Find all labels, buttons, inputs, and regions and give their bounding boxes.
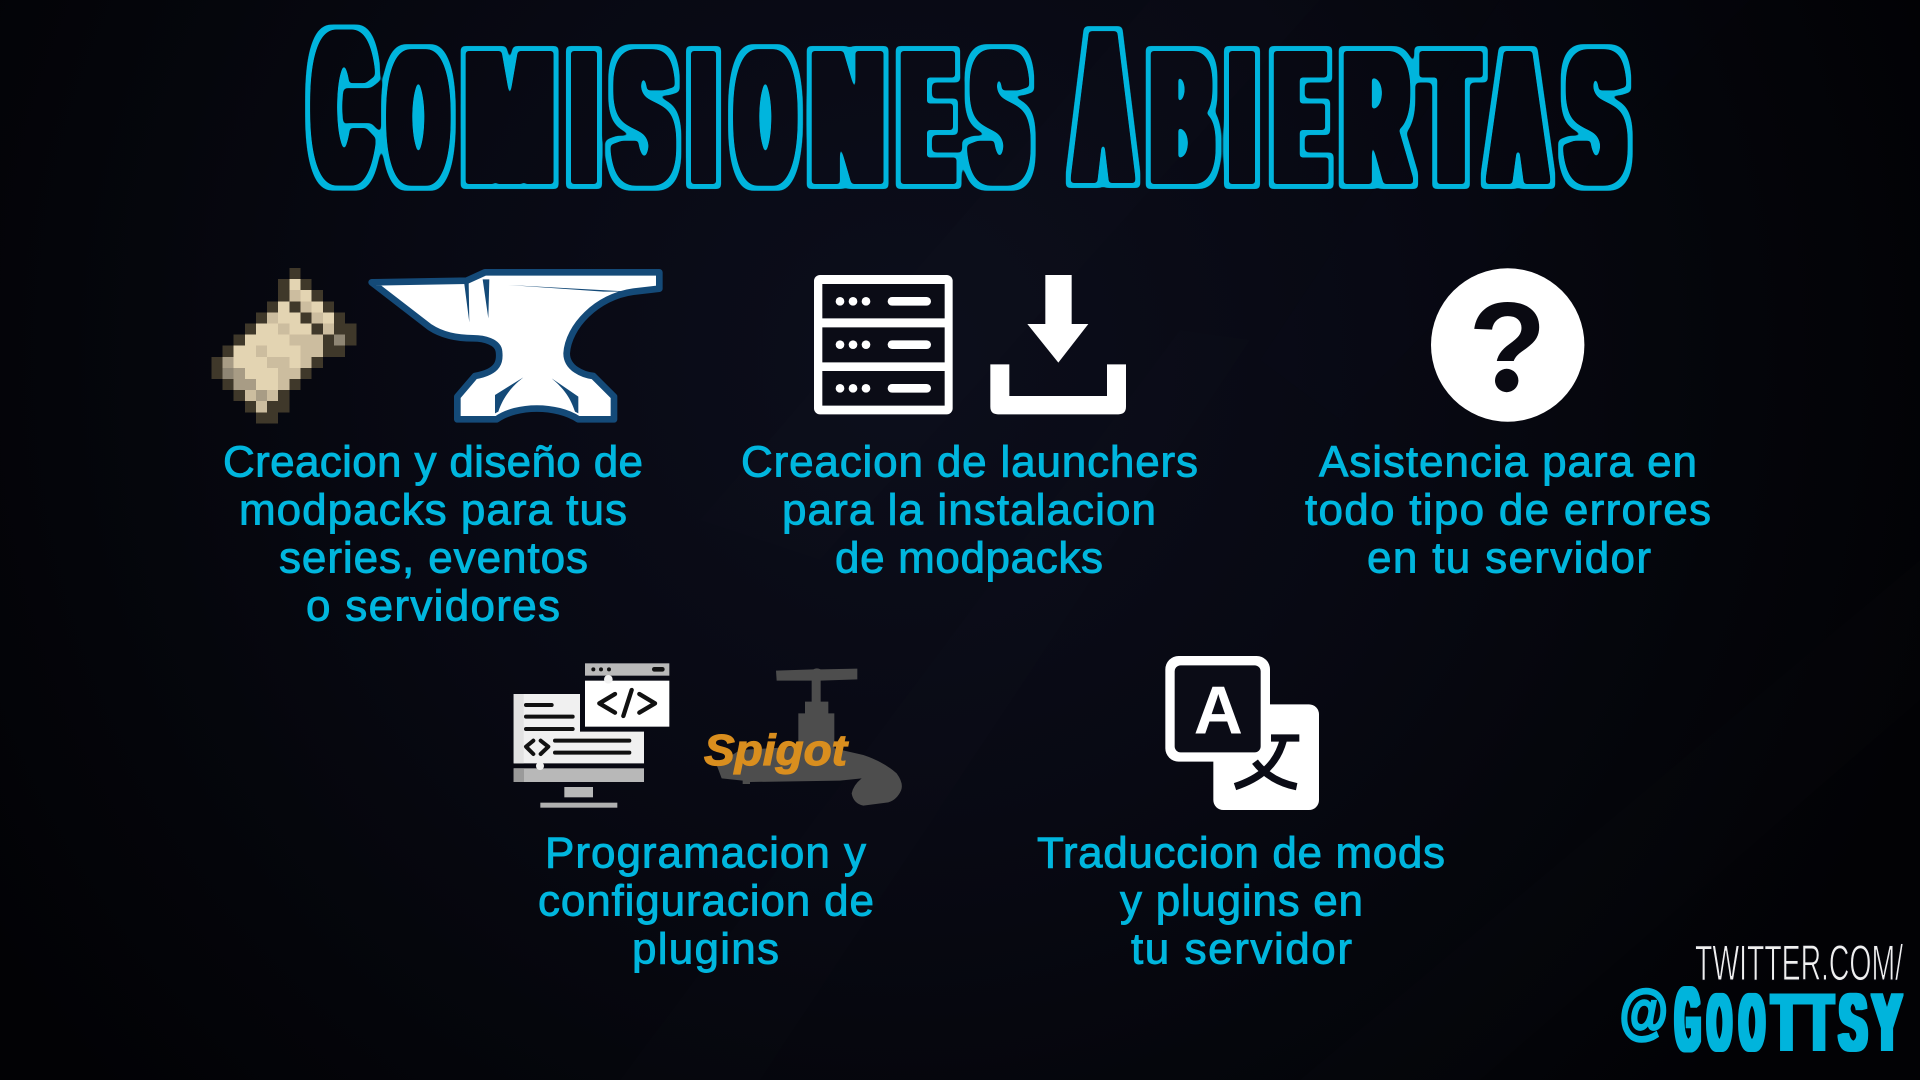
icon: spigot logo <box>704 668 902 806</box>
title: N <box>813 15 882 221</box>
handle: T <box>1805 976 1833 1067</box>
title: O <box>391 14 446 221</box>
text: plugins: Programacion y <box>545 828 866 878</box>
handle: O <box>1740 977 1764 1068</box>
title: O <box>738 14 793 221</box>
text: assistance: todo tipo de errores <box>1305 486 1711 534</box>
credit: twitter handle <box>1620 935 1903 1071</box>
panel: modpacks <box>211 268 659 630</box>
panel: launchers <box>741 275 1198 582</box>
icon: download <box>990 275 1126 414</box>
text: modpacks <box>223 438 643 630</box>
text: launchers <box>741 438 1198 582</box>
icon: translate: A <box>1194 672 1243 748</box>
icon: tap <box>717 668 902 806</box>
icon: server <box>814 275 953 414</box>
panel: translation <box>1037 656 1445 974</box>
text: modpacks: Creacion y diseño de <box>223 438 643 486</box>
title: I <box>1232 14 1252 221</box>
icon: question mark: ? <box>1468 277 1547 420</box>
text: translation: y plugins en <box>1120 876 1363 926</box>
spigot wordmark: Spigot <box>704 726 849 775</box>
icon: translate <box>1165 656 1319 810</box>
text: assistance: Asistencia para en <box>1319 438 1697 486</box>
text: plugins: plugins <box>632 924 779 974</box>
text: launchers: para la instalacion <box>782 486 1156 534</box>
icon: paper scroll <box>211 268 356 423</box>
title: A <box>1492 14 1544 221</box>
text: modpacks: series, eventos <box>279 534 588 582</box>
text: translation <box>1037 828 1445 974</box>
icon: anvil <box>372 272 659 419</box>
title: E <box>1277 14 1323 221</box>
handle: G <box>1676 969 1700 1071</box>
text: plugins: configuracion de <box>538 876 874 926</box>
at sign: @ <box>1620 978 1668 1045</box>
title: E <box>904 13 951 221</box>
title: S <box>973 15 1026 221</box>
text: modpacks: o servidores <box>306 582 560 630</box>
icon: code windows <box>514 663 669 808</box>
text: launchers: de modpacks <box>835 534 1103 582</box>
title: M <box>467 14 552 221</box>
handle: O <box>1708 977 1731 1067</box>
text: assistance: en tu servidor <box>1367 534 1651 582</box>
text: plugins <box>538 828 874 974</box>
handle <box>1676 969 1901 1071</box>
text: launchers: Creacion de launchers <box>741 438 1198 486</box>
title: S <box>616 15 671 221</box>
title: T <box>1426 15 1476 221</box>
title: B <box>1153 15 1211 221</box>
text: translation: Traduccion de mods <box>1037 828 1445 878</box>
handle: T <box>1772 978 1801 1068</box>
title <box>315 0 1623 226</box>
text: translation: tu servidor <box>1131 924 1352 974</box>
handle: S <box>1839 977 1867 1068</box>
title: I <box>695 15 712 221</box>
title: I <box>574 14 594 221</box>
panel: plugins <box>514 663 902 974</box>
icon: question mark <box>1431 268 1584 422</box>
title: S <box>1569 15 1623 221</box>
text: modpacks: modpacks para tus <box>239 486 627 534</box>
panel: assistance <box>1305 268 1711 582</box>
handle: Y <box>1873 976 1901 1067</box>
title: R <box>1346 15 1407 221</box>
text: assistance <box>1305 438 1711 582</box>
